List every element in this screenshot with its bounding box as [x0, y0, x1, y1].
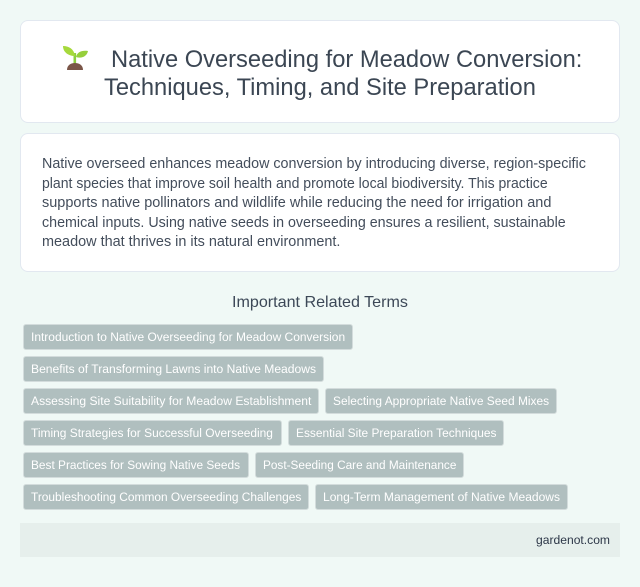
tag: [23, 388, 319, 414]
intro paragraph: supports native pollinators and wildlife while reducing the need for irrigation and: [42, 195, 551, 211]
footer source: gardenot.com: [536, 533, 610, 547]
tag: Assessing Site Suitability for Meadow Establishment: [31, 394, 311, 408]
intro paragraph: plant species that improve soil health and promote local biodiversity. This practice: [42, 176, 548, 192]
intro paragraph: chemical inputs. Using native seeds in overseeding ensures a resilient, sustainable: [42, 214, 566, 230]
tag: Best Practices for Sowing Native Seeds: [31, 458, 240, 472]
tag: Introduction to Native Overseeding for Meadow Conversion: [31, 330, 345, 344]
tag: Timing Strategies for Successful Overseeding: [31, 426, 273, 440]
intro text panel: [20, 133, 620, 272]
related terms heading: Important Related Terms: [232, 293, 408, 311]
tag: [325, 388, 557, 414]
tag: [288, 420, 504, 446]
tag: [255, 452, 464, 478]
tag: [23, 356, 324, 382]
title: Native Overseeding for Meadow Conversion:: [111, 47, 582, 73]
tag: Long-Term Management of Native Meadows: [323, 490, 560, 504]
tag: [23, 484, 309, 510]
tag: Selecting Appropriate Native Seed Mixes: [333, 394, 549, 408]
tag: Benefits of Transforming Lawns into Native Meadows: [31, 362, 316, 376]
intro paragraph: meadow that thrives in its natural environment.: [42, 234, 340, 250]
tag: [23, 324, 353, 350]
footer bar: [20, 523, 620, 557]
tag: [23, 420, 282, 446]
intro paragraph: Native overseed enhances meadow conversion by introducing diverse, region-specific: [42, 156, 586, 172]
tag: [23, 452, 249, 478]
title: [104, 47, 582, 101]
header panel: [20, 20, 620, 123]
title: Techniques, Timing, and Site Preparation: [104, 75, 536, 101]
related terms tags: [23, 324, 568, 510]
tag: Troubleshooting Common Overseeding Challenges: [31, 490, 301, 504]
intro paragraph: [42, 156, 586, 250]
tag: Essential Site Preparation Techniques: [296, 426, 496, 440]
tag: [315, 484, 568, 510]
tag: Post-Seeding Care and Maintenance: [263, 458, 456, 472]
icon: seedling: [63, 46, 88, 70]
